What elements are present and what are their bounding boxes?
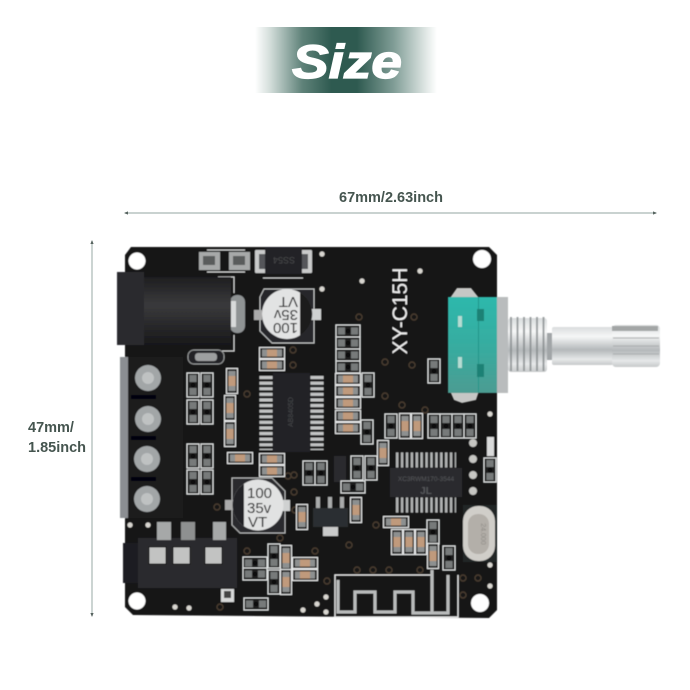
surface-mount components — [187, 325, 496, 610]
electrolytic capacitor top: 100 35v VT: 100 — [273, 319, 298, 336]
vias and test dots — [127, 251, 493, 615]
shaft — [552, 327, 613, 365]
electrolytic capacitor bottom: 100 35v VT: 100 — [247, 485, 272, 502]
teal housing — [448, 297, 498, 393]
height dimension: 47mm/1.85inch — [28, 240, 94, 617]
height dimension: 47mm/1.85inch: 47mm/ — [28, 420, 74, 436]
electrolytic capacitor top: 100 35v VT: 35v — [273, 306, 298, 323]
crystal oscillator — [463, 505, 496, 562]
audio processor chip: JL — [420, 486, 432, 497]
diode: SS54 — [273, 255, 295, 265]
DC power jack — [117, 272, 245, 364]
audio processor chip: XC3RWM170-3544 — [398, 476, 455, 483]
rotary potentiometer — [448, 288, 660, 403]
width dimension: 67mm/2.63inch: 67mm/2.63inch — [339, 190, 443, 206]
electrolytic capacitor top: 100 35v VT: VT — [279, 293, 298, 310]
audio processor chip — [390, 460, 462, 505]
main amplifier chip — [266, 373, 317, 452]
silkscreen model label: XY-C15H — [389, 268, 412, 354]
width dimension: 67mm/2.63inch — [124, 190, 657, 215]
main amplifier chip: AB8405D — [288, 397, 295, 427]
knurled knob — [612, 325, 660, 367]
title banner — [255, 27, 437, 93]
voltage regulator — [313, 497, 348, 536]
diode — [255, 248, 312, 278]
metal collar — [497, 297, 508, 393]
electrolytic capacitor bottom: 100 35v VT: VT — [248, 514, 267, 531]
bluetooth PCB antenna — [335, 570, 458, 617]
threaded bushing — [508, 318, 553, 372]
title banner: Size — [292, 35, 402, 88]
screw terminal block — [120, 357, 183, 518]
height dimension: 47mm/1.85inch: 1.85inch — [28, 440, 86, 456]
mounting lugs — [450, 288, 479, 403]
electrolytic capacitor bottom: 100 35v VT: 35v — [247, 500, 272, 517]
circuit board — [117, 247, 497, 618]
crystal oscillator: 24.000 — [479, 523, 486, 545]
audio jack — [123, 522, 237, 588]
electrolytic capacitor top: 100 35v VT — [254, 289, 321, 343]
top pads — [199, 250, 250, 272]
electrolytic capacitor bottom: 100 35v VT — [225, 478, 290, 533]
board substrate with mounting holes — [125, 247, 497, 618]
